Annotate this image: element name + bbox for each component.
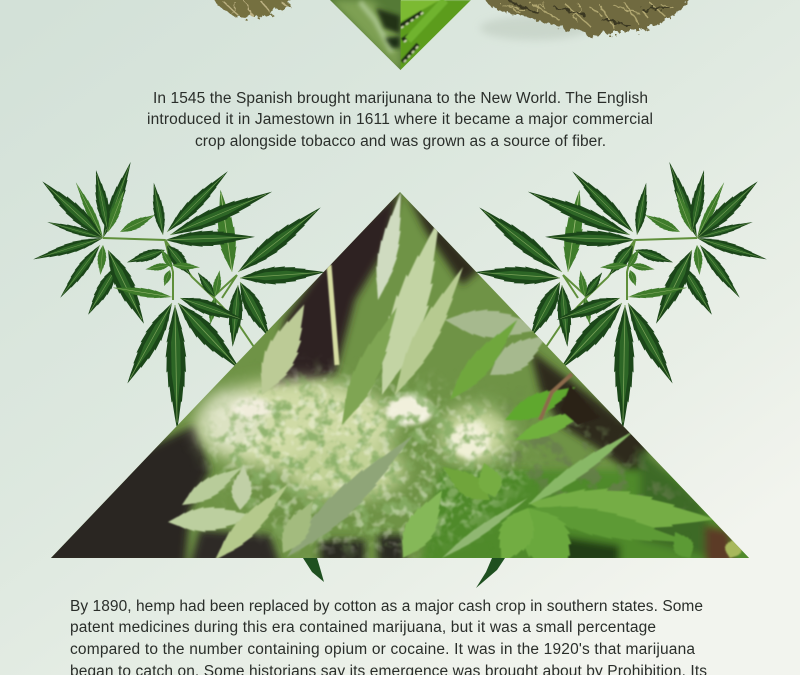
right bud shadow — [480, 16, 590, 40]
intro paragraph: introduced it in Jamestown in 1611 where it became a major commercial — [147, 111, 653, 128]
right leaf tip below triangle — [476, 558, 505, 588]
left bud photo — [212, 0, 300, 20]
photo base tones — [40, 185, 760, 565]
right bud photo — [482, 0, 690, 36]
right half: bright leaf — [400, 0, 472, 72]
left half: blurred plant — [330, 0, 401, 72]
intro paragraph: crop alongside tobacco and was grown as a source of fiber. — [195, 133, 606, 150]
left cannabis plant — [32, 160, 326, 430]
intro paragraph — [147, 90, 653, 150]
lower paragraph: patent medicines during this era contained marijuana, but it was a small percentage — [70, 619, 656, 636]
lower paragraph — [70, 598, 707, 675]
pale flowers — [195, 380, 510, 500]
lower paragraph: By 1890, hemp had been replaced by cotton as a major cash crop in southern states. Some — [70, 598, 703, 615]
top triangle photo — [330, 0, 472, 72]
intro paragraph: In 1545 the Spanish brought marijunana to the New World. The English — [153, 90, 648, 107]
left leaf tip below triangle — [303, 558, 324, 582]
flower texture — [196, 360, 528, 558]
right side texture — [503, 408, 684, 509]
lower leaves — [168, 432, 742, 558]
pale upper leaves — [247, 190, 600, 448]
main triangle photo — [51, 192, 749, 558]
right cannabis plant — [474, 160, 768, 430]
lower paragraph: compared to the number containing opium or cocaine. It was in the 1920's that marijuana — [70, 641, 695, 658]
